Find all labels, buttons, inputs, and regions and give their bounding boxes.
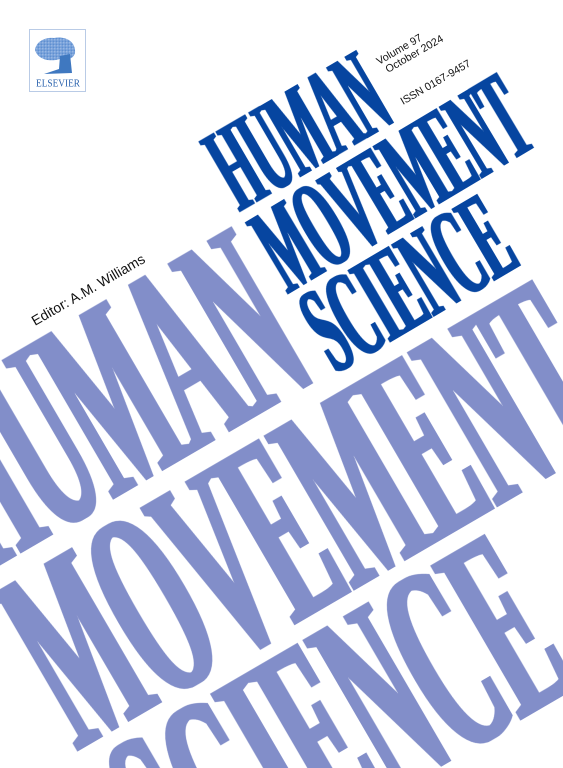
issn: ISSN 0167-9457 bbox=[398, 58, 473, 108]
editor: Editor: A.M. Williams bbox=[28, 251, 148, 329]
main title bbox=[185, 26, 553, 398]
tree canopy bbox=[35, 38, 75, 60]
publisher name: ELSEVIER bbox=[36, 78, 80, 90]
icon: Elsevier logo bbox=[30, 30, 86, 92]
tree trunk and ground bbox=[44, 54, 72, 74]
issue details bbox=[374, 32, 473, 108]
volume: Volume 97 bbox=[374, 32, 424, 68]
date: October 2024 bbox=[384, 33, 446, 76]
